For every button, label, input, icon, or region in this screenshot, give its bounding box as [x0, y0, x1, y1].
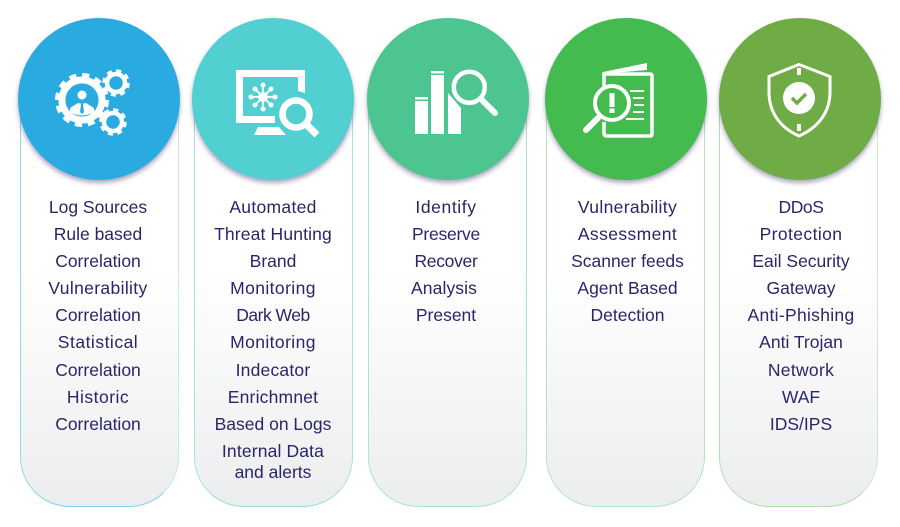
text block: column 2: Based on Logs — [215, 414, 331, 434]
text block: column 3: Present — [416, 305, 476, 325]
text block: column 5: Anti-Phishing — [747, 305, 854, 325]
text block: column 1: Correlation — [55, 414, 141, 434]
panel card — [20, 100, 179, 507]
text block: column 3: Preserve — [412, 224, 480, 244]
text block: column 5 — [747, 197, 854, 434]
text block: column 3: Identify — [415, 197, 477, 217]
panel: column 3 forensics — [364, 18, 532, 507]
text block: column 1: Correlation — [55, 251, 141, 271]
icon: shield with check — [769, 64, 830, 136]
icon circle — [719, 18, 881, 180]
panel: column 5 protection — [716, 18, 884, 507]
text block: column 1: Vulnerability — [48, 278, 148, 298]
icon circle — [192, 18, 354, 180]
text block: column 2 — [214, 197, 332, 482]
panel card — [546, 100, 705, 507]
text block: column 5: WAF — [782, 387, 820, 407]
text block: column 2: Monitoring — [230, 278, 316, 298]
text block: column 1: Correlation — [55, 305, 141, 325]
text block: column 5: Gateway — [766, 278, 836, 298]
panel: column 1 log sources — [15, 18, 183, 507]
text block: column 2: and alerts — [235, 462, 311, 482]
icon circle — [367, 18, 529, 180]
text block: column 2: Threat Hunting — [214, 224, 332, 244]
text block: column 5: DDoS — [778, 197, 824, 217]
text block: column 5: IDS/IPS — [770, 414, 832, 434]
panel: column 2 threat hunting — [189, 18, 357, 507]
text block: column 2: Dark Web — [236, 305, 310, 325]
panel card — [719, 100, 878, 507]
icon circle — [545, 18, 707, 180]
panel card — [368, 100, 526, 507]
text block: column 4: Assessment — [578, 224, 677, 244]
text block: column 4: Detection — [591, 305, 664, 325]
text block: column 4: Agent Based — [577, 278, 678, 298]
text block: column 4 — [571, 197, 684, 325]
text block: column 3 — [411, 197, 480, 325]
text block: column 5: Protection — [760, 224, 842, 244]
text block: column 3: Recover — [414, 251, 478, 271]
text block: column 1: Rule based — [54, 224, 142, 244]
icon: gears with person — [58, 71, 128, 134]
text block: column 2: Monitoring — [230, 332, 316, 352]
text block: column 5: Eail Security — [752, 251, 850, 271]
panel: column 4 vulnerability — [542, 18, 710, 507]
text block: column 1: Historic — [67, 387, 129, 407]
text block: column 2: Indecator — [236, 360, 310, 380]
text block: column 4: Scanner feeds — [571, 251, 684, 271]
icon: books and magnifier — [415, 71, 495, 134]
text block: column 5: Network — [768, 360, 834, 380]
icon: document with alert magnifier — [586, 63, 652, 136]
icon: monitor with virus and magnifier — [236, 70, 317, 135]
text block: column 1: Log Sources — [49, 197, 147, 217]
text block: column 5: Anti Trojan — [759, 332, 843, 352]
text block: column 2: Enrichmnet — [228, 387, 318, 407]
text block: column 3: Analysis — [411, 278, 477, 298]
icon circle — [18, 18, 180, 180]
panel card — [194, 100, 353, 507]
text block: column 2: Brand — [250, 251, 296, 271]
text block: column 1: Correlation — [55, 360, 141, 380]
text block: column 4: Vulnerability — [578, 197, 677, 217]
text block: column 1: Statistical — [58, 332, 138, 352]
text block: column 2: Internal Data — [222, 441, 324, 461]
text block: column 1 — [48, 197, 148, 434]
text block: column 2: Automated — [229, 197, 317, 217]
